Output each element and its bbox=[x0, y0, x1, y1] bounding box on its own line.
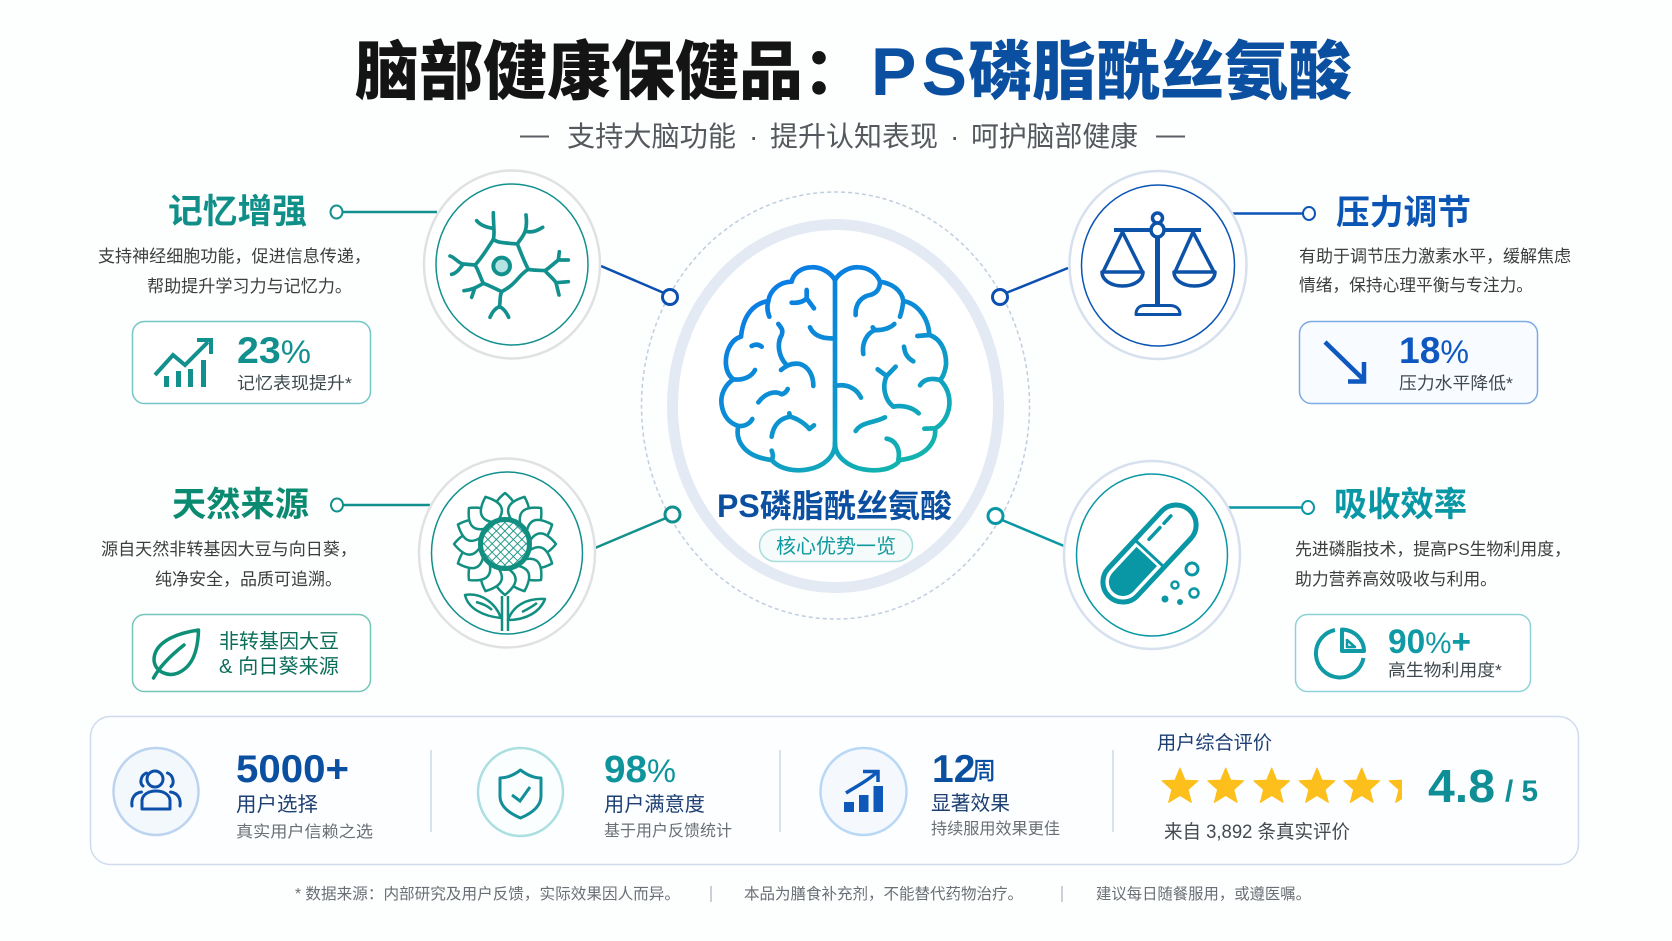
stat label: stress: 压力水平降低* bbox=[1399, 374, 1513, 393]
title: PS bbox=[871, 34, 967, 110]
panel: memory bbox=[98, 170, 678, 404]
number: 4.8: 4.8 bbox=[1428, 760, 1495, 812]
number: 98%: 98% bbox=[604, 749, 676, 791]
stat: 23%: 23% bbox=[237, 330, 311, 371]
heading: stress: 压力调节 bbox=[1336, 194, 1471, 232]
text: memory description: 帮助提升学习力与记忆力。 bbox=[147, 277, 352, 296]
stat: 90%+: 90%+ bbox=[1388, 623, 1471, 661]
icon: neuron bbox=[424, 170, 600, 358]
heading: absorption: 吸收效率 bbox=[1334, 486, 1467, 524]
connector: absorption heading bbox=[1228, 501, 1314, 514]
label: users: 用户选择 bbox=[236, 793, 318, 816]
icon: users bbox=[114, 748, 198, 835]
text: source label: 非转基因大豆 bbox=[219, 630, 339, 653]
text: natural description: 源自天然非转基因大豆与向日葵， bbox=[101, 540, 357, 559]
panel: natural source bbox=[101, 458, 680, 692]
heading: rating: 用户综合评价 bbox=[1157, 732, 1272, 754]
subtitle: · bbox=[749, 121, 758, 152]
connector: memory heading bbox=[330, 206, 437, 218]
central hub bbox=[642, 192, 1030, 619]
stat: 18%: 18% bbox=[1399, 330, 1469, 371]
icon: down arrow bbox=[1325, 342, 1364, 382]
title: 脑部健康保健品： bbox=[355, 36, 867, 108]
note: review count: 来自 3,892 条真实评价 bbox=[1164, 821, 1350, 843]
stat card: memory bbox=[132, 322, 370, 404]
stat: rating bbox=[1157, 732, 1538, 843]
icon: stars bbox=[1162, 768, 1425, 802]
title: 磷脂酰丝氨酸 bbox=[968, 36, 1352, 108]
stat: duration bbox=[820, 748, 1060, 838]
panel: stress bbox=[992, 171, 1571, 404]
number: 12 weeks: 12 bbox=[932, 748, 975, 791]
text: source label: & 向日葵来源 bbox=[219, 655, 339, 678]
text: absorption description bbox=[1295, 540, 1571, 589]
stat label: memory: 记忆表现提升* bbox=[237, 374, 352, 393]
heading: natural source: 天然来源 bbox=[172, 486, 309, 524]
icon: sunflower bbox=[419, 458, 595, 648]
text: memory description bbox=[98, 247, 371, 296]
connector: stress heading bbox=[1233, 207, 1315, 220]
stat card: stress bbox=[1300, 322, 1538, 404]
number: out of 5: / 5 bbox=[1505, 775, 1538, 808]
title bbox=[355, 34, 1352, 110]
connector: memory to hub bbox=[601, 266, 678, 304]
stat: satisfaction bbox=[478, 748, 732, 840]
subtitle: 支持大脑功能 bbox=[567, 121, 736, 152]
footnote: 建议每日随餐服用，或遵医嘱。 bbox=[1096, 885, 1311, 903]
panel: absorption bbox=[988, 461, 1571, 692]
stat card: natural bbox=[132, 614, 370, 692]
label: satisfaction: 用户满意度 bbox=[604, 793, 705, 816]
text: absorption description: 先进磷脂技术，提高PS生物利用度， bbox=[1295, 540, 1571, 559]
panel: summary bar bbox=[90, 716, 1578, 864]
text: source label bbox=[219, 630, 339, 678]
stat: users bbox=[114, 748, 373, 841]
text: natural description: 纯净安全，品质可追溯。 bbox=[155, 570, 342, 589]
stat label: absorption: 高生物利用度* bbox=[1388, 661, 1502, 680]
icon: brain bbox=[721, 267, 949, 470]
hub pill: 核心优势一览 bbox=[776, 535, 896, 558]
subtitle: · bbox=[950, 121, 959, 152]
footnote: * 数据来源：内部研究及用户反馈，实际效果因人而异。 bbox=[295, 885, 680, 903]
text: absorption description: 助力营养高效吸收与利用。 bbox=[1295, 570, 1497, 589]
note: satisfaction: 基于用户反馈统计 bbox=[604, 822, 732, 840]
number: 5000+: 5000+ bbox=[236, 748, 349, 791]
icon: rising chart bbox=[155, 340, 211, 387]
text: stress description bbox=[1299, 247, 1571, 295]
footnote: 本品为膳食补充剂，不能替代药物治疗。 bbox=[744, 885, 1023, 903]
heading: memory: 记忆增强 bbox=[168, 193, 307, 231]
text: natural description bbox=[101, 540, 357, 589]
hub label: PS磷脂酰丝氨酸 bbox=[717, 488, 952, 524]
connector: natural heading bbox=[331, 498, 430, 512]
text: stress description: 有助于调节压力激素水平，缓解焦虑 bbox=[1299, 247, 1571, 266]
text: stress description: 情绪，保持心理平衡与专注力。 bbox=[1299, 276, 1533, 295]
icon: growth bars bbox=[820, 748, 906, 835]
subtitle: 呵护脑部健康 bbox=[971, 121, 1138, 152]
icon: leaf bbox=[154, 630, 198, 678]
label: duration: 显著效果 bbox=[931, 792, 1010, 815]
connector: absorption to hub bbox=[988, 508, 1064, 546]
stat card: absorption bbox=[1296, 614, 1530, 692]
subtitle bbox=[520, 121, 1185, 152]
note: users: 真实用户信赖之选 bbox=[236, 823, 373, 841]
connector: natural to hub bbox=[595, 507, 680, 548]
number: 12 weeks bbox=[932, 748, 996, 791]
icon: balance scale bbox=[1070, 171, 1246, 359]
note: duration: 持续服用效果更佳 bbox=[931, 820, 1060, 838]
text: memory description: 支持神经细胞功能，促进信息传递， bbox=[98, 247, 371, 266]
footnote bbox=[295, 885, 1311, 903]
icon: shield bbox=[478, 748, 563, 836]
connector: stress to hub bbox=[992, 268, 1068, 304]
number: 12 weeks: 周 bbox=[972, 758, 996, 785]
subtitle: 提升认知表现 bbox=[770, 121, 938, 152]
icon: capsule bbox=[1064, 461, 1240, 649]
icon: pie chart bbox=[1316, 630, 1364, 677]
hub pill bbox=[760, 530, 912, 562]
